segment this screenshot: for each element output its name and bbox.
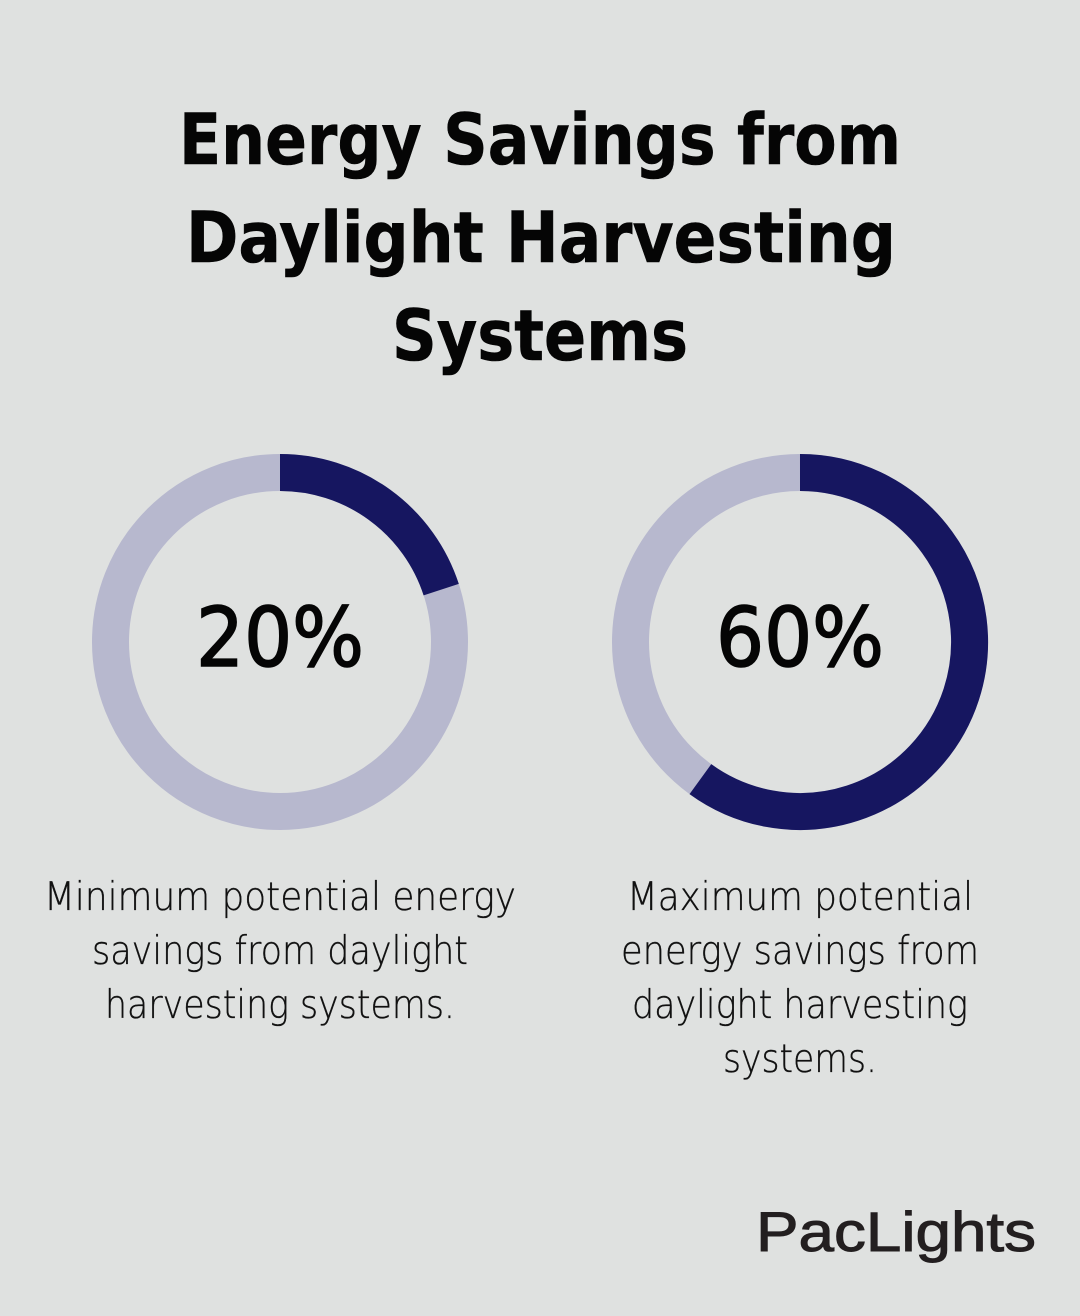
donut chart: 60% [630, 472, 970, 812]
description: minimum: harvesting systems. [105, 983, 455, 1028]
title [179, 99, 901, 377]
value: 20%: 20% [196, 591, 364, 686]
description: minimum: savings from daylight [92, 929, 468, 974]
value: 60%: 60% [716, 591, 884, 686]
panel: maximum savings [621, 472, 979, 1082]
description: maximum: energy savings from [621, 929, 979, 974]
title: Systems [392, 295, 688, 377]
description: maximum: Maximum potential [627, 875, 973, 920]
description: maximum: systems. [723, 1037, 877, 1082]
title: Daylight Harvesting [186, 197, 896, 279]
description: minimum [44, 875, 516, 1028]
donut chart: 20% [110, 472, 450, 812]
description: minimum: Minimum potential energy [44, 875, 516, 920]
logo: PacLights: PacLights [756, 1200, 1036, 1263]
title: Energy Savings from [179, 99, 901, 181]
description: maximum [621, 875, 979, 1082]
description: maximum: daylight harvesting [632, 983, 968, 1028]
panel: minimum savings [44, 472, 516, 1028]
